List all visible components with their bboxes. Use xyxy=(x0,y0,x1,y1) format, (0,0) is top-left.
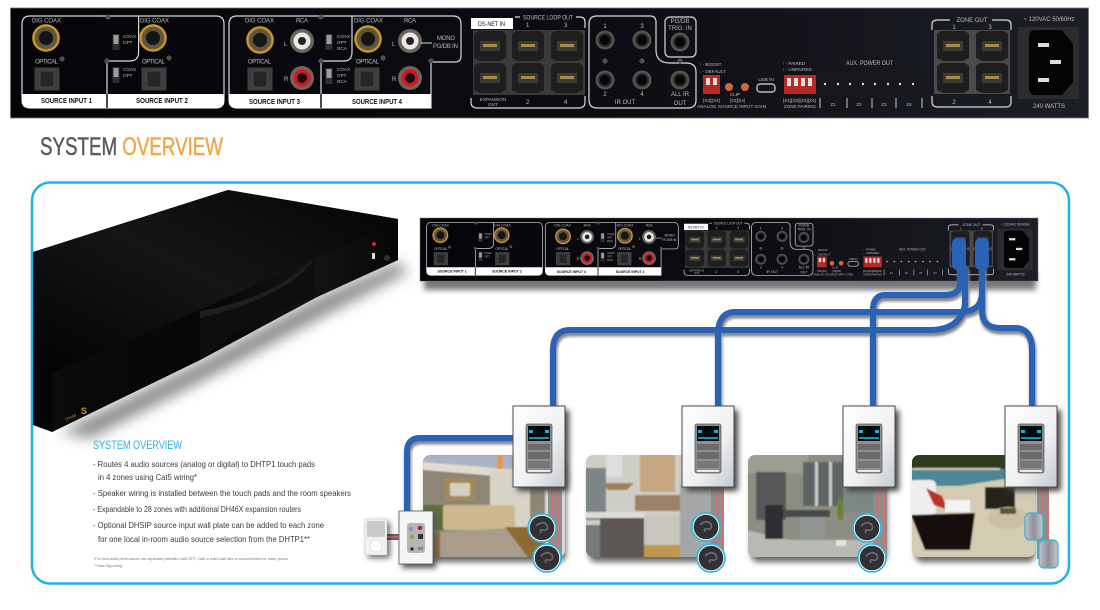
speakers room 3 xyxy=(853,514,886,572)
bullet list xyxy=(93,459,351,544)
panel: source inputs 3 and 4 xyxy=(229,15,461,108)
zone pairing DIP switches: ↑ - PAIRED xyxy=(782,61,806,66)
text heading: SYSTEM OVERVIEW xyxy=(93,438,183,452)
zone out RJ45 jacks xyxy=(932,18,1011,107)
panel: DS-Net and source loop RJ45 jacks: 4 xyxy=(564,100,568,106)
panel: source inputs 3 and 4: COAX xyxy=(337,34,350,39)
panel: source inputs 3 and 4: COAX xyxy=(337,67,350,72)
router front product view xyxy=(33,190,408,438)
analog source input gain controls: [S3][S4] xyxy=(703,98,720,103)
panel: source inputs 1 and 2: COAX xyxy=(123,34,136,39)
aux power out terminal xyxy=(817,61,922,108)
panel: source inputs 1 and 2: SOURCE INPUT 2 xyxy=(136,98,188,105)
title: SYSTEM OVERVIEW xyxy=(40,133,223,161)
zone pairing DIP switches xyxy=(782,61,816,109)
USB input: USB IN xyxy=(758,77,774,82)
panel: DS-Net and source loop RJ45 jacks: 1 xyxy=(526,23,530,29)
panel: source inputs 3 and 4: DIG COAX xyxy=(354,18,383,24)
analog source input gain controls: ↑ - BOOST xyxy=(699,62,722,67)
speaker wires from touch pads xyxy=(548,487,1049,560)
panel: source inputs 3 and 4: SOURCE INPUT 3 xyxy=(249,99,300,106)
analog source input gain controls: [S3][S4] xyxy=(730,98,745,103)
panel: source inputs 3 and 4: RCA xyxy=(404,18,416,24)
room 2: kitchen photo xyxy=(583,452,713,562)
touch pad 1 xyxy=(513,406,569,491)
panel: source inputs 3 and 4: R xyxy=(284,77,289,83)
panel: IR out jacks: ALL IR xyxy=(671,92,690,98)
panel: DS-Net and source loop RJ45 jacks: OUT xyxy=(488,102,498,107)
power inlet xyxy=(1018,17,1079,110)
aux power out terminal: Z2 xyxy=(856,102,862,107)
panel: source inputs 3 and 4: R xyxy=(392,77,397,83)
room 1: bedroom photo xyxy=(420,452,568,562)
panel: source inputs 1 and 2: OPTICAL xyxy=(142,60,166,66)
footnotes: **Data Tag wiring xyxy=(94,564,122,568)
analog source input gain controls: ↓ - DEFAULT xyxy=(699,69,726,74)
panel: DS-Net and source loop RJ45 jacks: DS-NET IN xyxy=(478,22,505,28)
aux power out terminal: AUX. POWER OUT xyxy=(846,61,893,67)
bullet list: in 4 zones using Cat5 wiring* xyxy=(98,472,198,482)
panel: source inputs 3 and 4: PG/DB IN xyxy=(433,44,458,50)
touch pad 4 xyxy=(1005,406,1061,491)
panel: IR out jacks: 4 xyxy=(640,92,644,98)
zone pairing DIP switches: ↓ - UNPAIRED xyxy=(782,67,812,72)
panel: source inputs 1 and 2: DIG COAX xyxy=(32,18,61,24)
room 3: office photo xyxy=(745,452,890,562)
aux power out terminal: Z1 xyxy=(830,102,836,107)
USB input xyxy=(757,77,775,92)
bullet list: - Routes 4 audio sources (analog or digital) to DHTP1 touch pads xyxy=(93,459,315,469)
power inlet: 240 WATTS xyxy=(1033,104,1065,110)
power inlet: ~ 120VAC 50/60Hz xyxy=(1023,17,1075,23)
panel: DS-Net and source loop RJ45 jacks: EXPANSION xyxy=(480,97,506,102)
footnotes xyxy=(94,557,289,568)
panel: system overview frame xyxy=(32,182,1069,584)
in-wall source input plate and media player xyxy=(365,511,436,568)
panel: source inputs 3 and 4: RCA xyxy=(337,79,348,84)
router front product view: DH44 xyxy=(64,412,77,422)
footnotes: *For best audio performance use separately shielded Cat5 STP; Cat6 or solid Cat5 wire is recommended for video; power xyxy=(94,557,289,561)
panel: source inputs 1 and 2: OPT xyxy=(123,73,133,78)
zone pairing DIP switches: ZONE PAIRING xyxy=(784,104,816,109)
bullet list: for one local in-room audio source selection from the DHTP1** xyxy=(98,534,311,544)
zone pairing DIP switches: [Z1][Z2][Z3][Z4] xyxy=(783,98,816,103)
bullet list: - Speaker wiring is installed between the touch pads and the room speakers xyxy=(93,488,351,498)
panel: source inputs 3 and 4: OPTICAL xyxy=(356,60,380,66)
panel: source inputs 1 and 2: DIG COAX xyxy=(140,18,169,24)
panel: IR out jacks: 3 xyxy=(640,24,644,30)
panel: IR out jacks: OUT xyxy=(674,101,687,107)
outdoor speakers room 4 xyxy=(1025,513,1058,568)
panel: DS-Net and source loop RJ45 jacks: 2 xyxy=(526,100,530,106)
analog source input gain controls: CLIP xyxy=(730,92,740,97)
panel: source inputs 3 and 4: L xyxy=(284,42,288,48)
panel: source inputs 3 and 4: DIG COAX xyxy=(245,18,274,24)
panel: source inputs 1 and 2: SOURCE INPUT 1 xyxy=(41,98,92,105)
panel: source inputs 1 and 2: OPT xyxy=(123,40,133,45)
router front product view: S xyxy=(81,406,87,416)
touch pad 3 xyxy=(843,406,899,491)
aux power out terminal: Z4 xyxy=(906,102,912,107)
panel: PG/DB trigger in: TRIG. IN xyxy=(668,26,692,32)
zone out RJ45 jacks: ZONE OUT xyxy=(956,18,988,24)
panel: PG/DB trigger in: PG/DB xyxy=(671,19,689,25)
small rear panel with shadow xyxy=(420,218,1038,290)
panel: source inputs 3 and 4: SOURCE INPUT 4 xyxy=(352,99,402,106)
touch pad 2 xyxy=(682,406,738,491)
zone out RJ45 jacks: 3 xyxy=(988,25,992,31)
bullet list: - Expandable to 28 zones with additional DH46X expansion routers xyxy=(93,504,301,514)
panel: DS-Net and source loop RJ45 jacks: 3 xyxy=(564,23,568,29)
analog source input gain controls xyxy=(697,62,766,109)
panel: IR out jacks xyxy=(589,16,696,108)
panel: IR out jacks: 2 xyxy=(603,92,607,98)
panel: source inputs 3 and 4: OPT xyxy=(337,40,347,45)
panel: PG/DB trigger in xyxy=(665,17,696,57)
zone out RJ45 jacks: 2 xyxy=(952,100,956,106)
panel: IR out jacks: IR OUT xyxy=(615,100,635,106)
panel: source inputs 3 and 4: RCA xyxy=(337,46,348,51)
panel: source inputs 1 and 2: OPTICAL xyxy=(35,60,59,66)
zone out RJ45 jacks: 4 xyxy=(988,100,992,106)
rear panel: full-width router back xyxy=(10,8,1088,118)
bullet list: - Optional DHSIP source input wall plate can be added to each zone xyxy=(93,520,324,530)
panel: DS-Net and source loop RJ45 jacks xyxy=(471,16,585,108)
room 4: patio and pool photo xyxy=(909,452,1039,562)
system overview text block xyxy=(93,438,351,568)
panel: source inputs 3 and 4: L xyxy=(392,42,396,48)
panel: source inputs 1 and 2 xyxy=(22,15,224,108)
speakers room 2 xyxy=(692,513,725,572)
speakers room 1 xyxy=(528,514,561,572)
panel: source inputs 3 and 4: OPTICAL xyxy=(248,60,272,66)
analog source input gain controls: ANALOG SOURCE INPUT GAIN xyxy=(697,104,766,109)
aux power out terminal: Z3 xyxy=(881,102,887,107)
blue cable to in-wall source plate xyxy=(407,438,514,515)
panel: source inputs 3 and 4: OPT xyxy=(337,73,347,78)
panel: source inputs 1 and 2: COAX xyxy=(123,67,136,72)
panel: DS-Net and source loop RJ45 jacks: SOURCE LOOP OUT xyxy=(523,16,573,22)
blue cat5 cables from zone out to touch pads xyxy=(553,238,1033,408)
panel: source inputs 3 and 4: MONO xyxy=(437,36,455,42)
zone out RJ45 jacks: 1 xyxy=(952,25,956,31)
panel: IR out jacks: 1 xyxy=(603,24,607,30)
panel: source inputs 3 and 4: RCA xyxy=(296,18,308,24)
